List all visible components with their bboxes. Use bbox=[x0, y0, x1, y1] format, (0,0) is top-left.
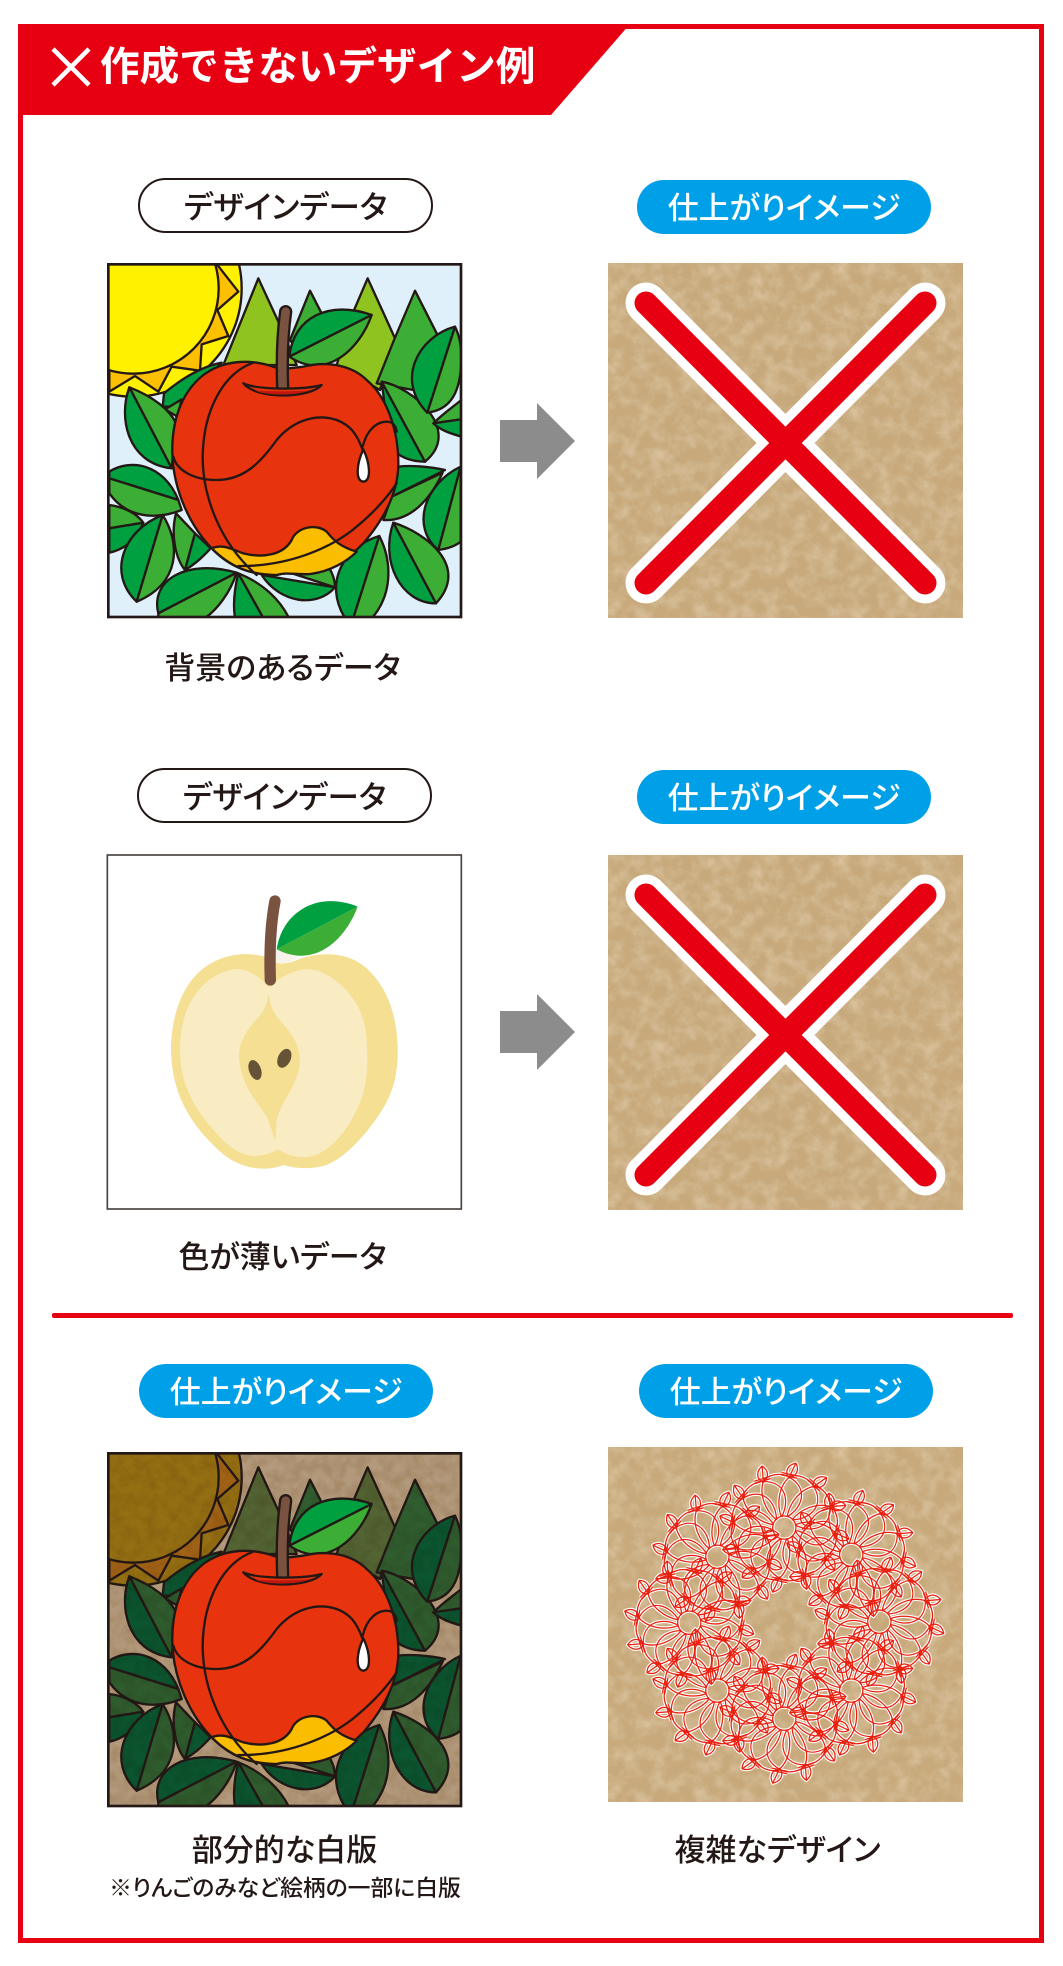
arrow 1 bbox=[500, 403, 575, 479]
illustration: apple with background bbox=[107, 263, 462, 618]
kraft sample with cross 1 bbox=[608, 263, 963, 618]
pill: finished image 1: 仕上がりイメージ bbox=[668, 191, 900, 226]
divider bbox=[52, 1313, 1013, 1318]
pill: finished image 3: 仕上がりイメージ bbox=[170, 1375, 402, 1410]
title banner bbox=[23, 29, 626, 115]
caption: pale data: 色が薄いデータ bbox=[178, 1240, 387, 1275]
pill: finished image 3 bbox=[139, 1364, 433, 1418]
pill: finished image 2 bbox=[637, 770, 931, 824]
illustration: partial white plate apple bbox=[107, 1452, 462, 1808]
illustration: pale apple bbox=[106, 854, 462, 1210]
arrow 2 bbox=[500, 994, 575, 1070]
pill: finished image 4: 仕上がりイメージ bbox=[670, 1375, 902, 1410]
caption: partial white plate: 部分的な白版 bbox=[192, 1833, 377, 1868]
pill: finished image 2: 仕上がりイメージ bbox=[668, 781, 900, 816]
pill: design data 1: デザインデータ bbox=[184, 189, 387, 225]
pill: finished image 4 bbox=[639, 1364, 933, 1418]
pill: design data 2: デザインデータ bbox=[183, 779, 386, 815]
caption: complex design: 複雑なデザイン bbox=[674, 1833, 881, 1868]
pill: design data 1 bbox=[138, 178, 433, 233]
note: partial white plate: ※りんごのみなど絵柄の一部に白版 bbox=[109, 1875, 461, 1901]
title: 作成できないデザイン例 bbox=[100, 45, 535, 89]
kraft sample with complex mandala bbox=[608, 1447, 963, 1802]
caption: data with background: 背景のあるデータ bbox=[164, 651, 401, 686]
pill: finished image 1 bbox=[637, 180, 931, 234]
icon: cross mark bbox=[52, 47, 90, 87]
banner shape bbox=[23, 29, 626, 115]
kraft sample with cross 2 bbox=[608, 855, 963, 1210]
pill: design data 2 bbox=[137, 768, 432, 823]
